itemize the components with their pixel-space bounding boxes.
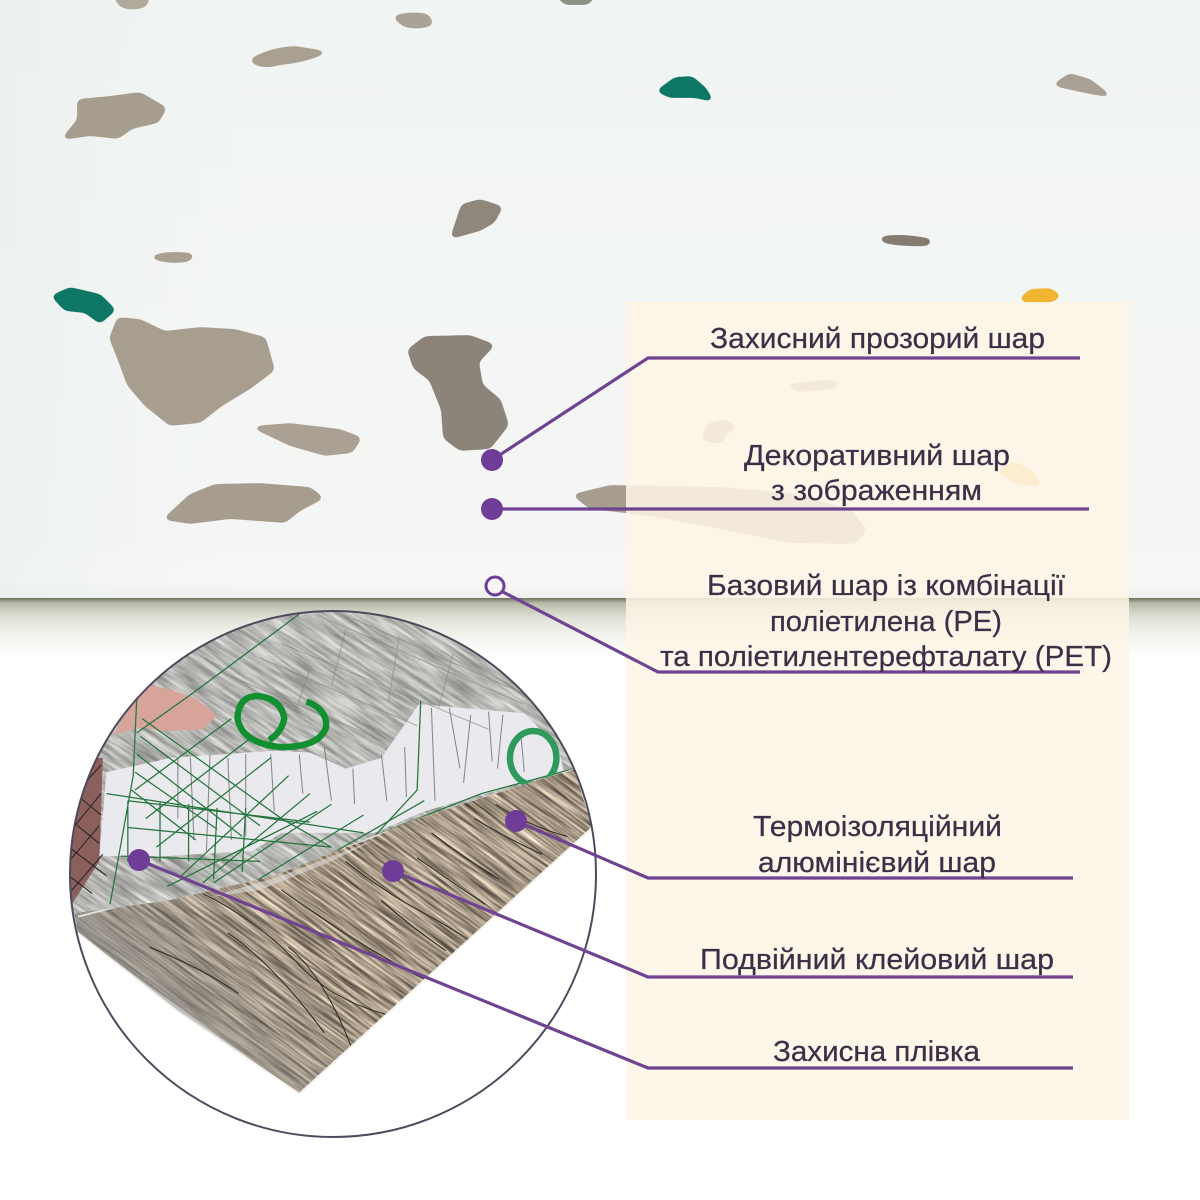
callout: base layer PE and PET — [486, 570, 1112, 673]
callout: base layer PE and PET: поліетилена (PE) — [770, 606, 1002, 638]
callout: base layer PE and PET: Базовий шар із комбінації — [707, 570, 1065, 602]
peeled edge shine — [78, 769, 574, 917]
callout: protective film — [128, 849, 1073, 1068]
panel board surface — [0, 0, 1200, 598]
callout: decorative image layer — [481, 440, 1089, 520]
callout: thermal insulating aluminium layer — [505, 810, 1073, 879]
callout: protective film: Захисна плівка — [773, 1036, 981, 1068]
circle outline — [70, 611, 596, 1137]
callout: base layer PE and PET: та поліетилентерефталату (PET) — [660, 641, 1112, 673]
sample bottom edge — [78, 827, 592, 1094]
green logo marks — [237, 696, 556, 785]
callout: thermal insulating aluminium layer: алюмінієвий шар — [758, 847, 996, 879]
green grid film — [106, 611, 574, 904]
silver foil layer — [71, 612, 573, 914]
brick underlayer grid — [69, 765, 106, 894]
callout: thermal insulating aluminium layer: Термоізоляційний — [753, 811, 1002, 843]
callout: double adhesive layer — [382, 860, 1073, 977]
magnified corner circle — [69, 610, 597, 1138]
text background panel — [626, 302, 1129, 1120]
wood decor layer — [74, 769, 591, 1092]
wood cracks — [149, 804, 567, 1051]
peeled silver and wood sample — [71, 612, 591, 1094]
shadow under the panel — [0, 597, 1200, 659]
callout: decorative image layer: з зображенням — [771, 475, 982, 507]
callout: protective clear layer — [481, 323, 1080, 471]
callout: double adhesive layer: Подвійний клейовий шар — [700, 944, 1054, 976]
callout: protective clear layer: Захисний прозорий шар — [710, 323, 1045, 355]
terrazzo decorative chips — [52, 0, 1112, 543]
callout: decorative image layer: Декоративний шар — [744, 440, 1010, 472]
